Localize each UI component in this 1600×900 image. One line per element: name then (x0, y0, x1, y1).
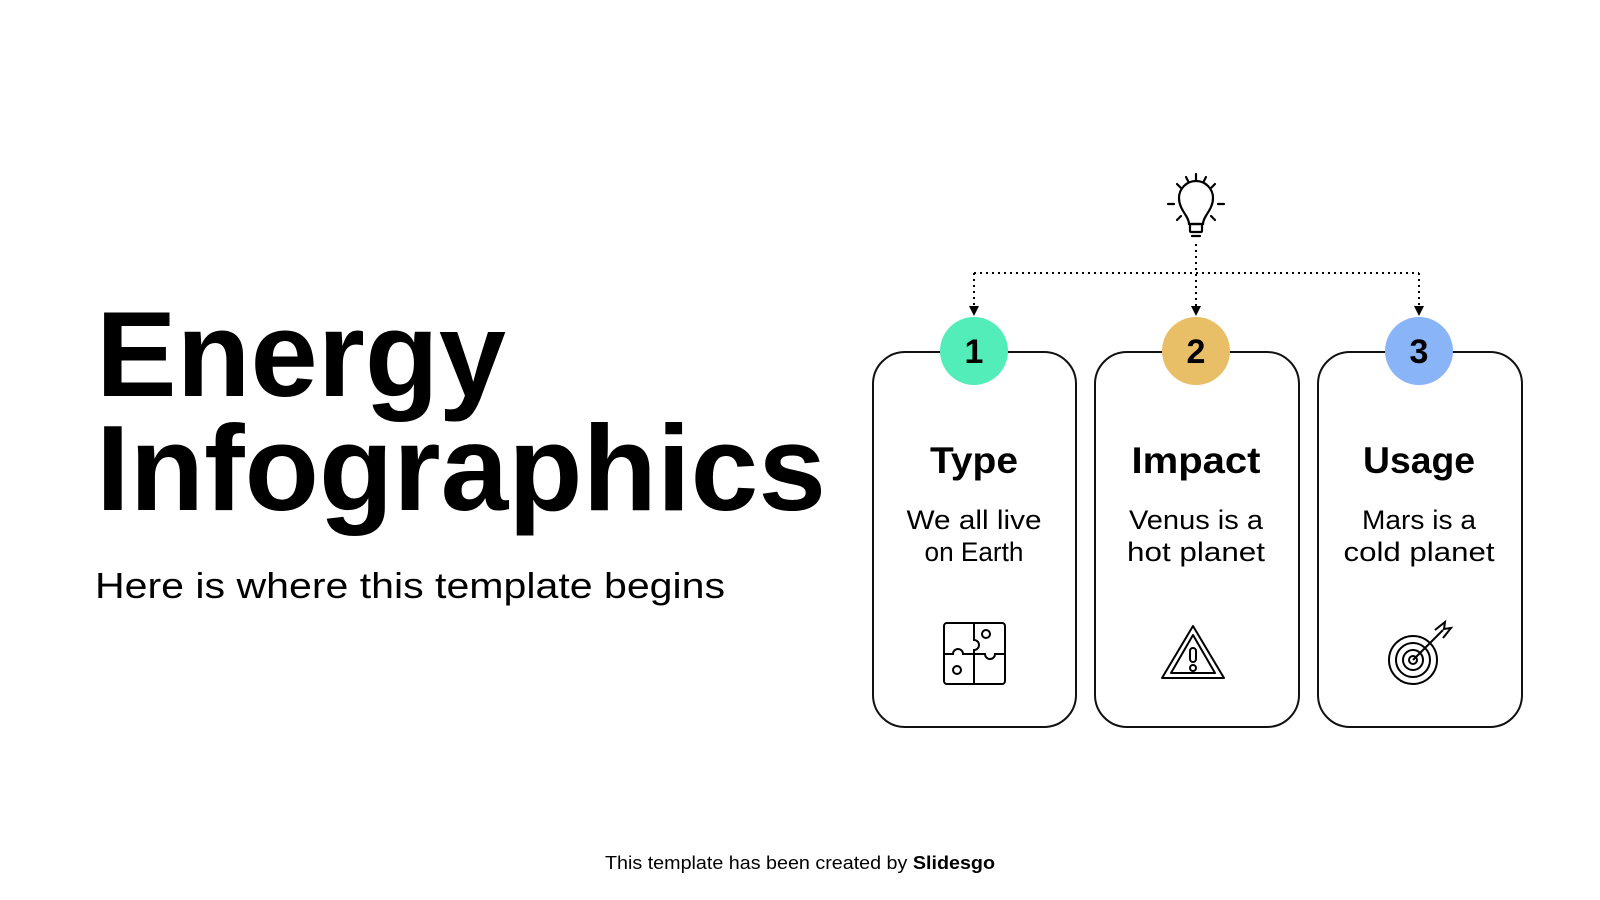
panel: usage (1318, 317, 1522, 727)
text: usage: cold planet (1344, 537, 1495, 567)
title (96, 286, 826, 536)
icon: warning (1162, 626, 1224, 678)
subtitle: Here is where this template begins (95, 565, 725, 606)
footer credit: This template has been created by Slidesgo (605, 853, 995, 873)
panel: impact (1095, 317, 1299, 727)
number badge 1: 1 (965, 333, 983, 371)
number badge 3: 3 (1410, 333, 1428, 371)
heading: type: Type (930, 440, 1018, 481)
text: impact (1127, 505, 1266, 567)
number badge 2 (1162, 317, 1230, 385)
icon: target (1389, 622, 1451, 684)
number badge 1 (940, 317, 1008, 385)
number badge 3 (1385, 317, 1453, 385)
heading: usage: Usage (1363, 440, 1475, 481)
title: Infographics (96, 400, 826, 536)
text: type: We all live (906, 505, 1042, 535)
text: type: on Earth (924, 537, 1024, 567)
text: impact: hot planet (1127, 537, 1266, 567)
icon: light bulb (1168, 174, 1224, 236)
panel: type (873, 317, 1076, 727)
title: Energy (96, 286, 506, 422)
number badge 2: 2 (1187, 333, 1205, 371)
text: usage: Mars is a (1362, 505, 1477, 535)
icon: puzzle (944, 623, 1005, 684)
text: type (906, 505, 1042, 567)
heading: impact: Impact (1132, 440, 1260, 481)
text: usage (1344, 505, 1495, 567)
arrow: dotted connectors (969, 244, 1424, 316)
text: impact: Venus is a (1129, 505, 1264, 535)
